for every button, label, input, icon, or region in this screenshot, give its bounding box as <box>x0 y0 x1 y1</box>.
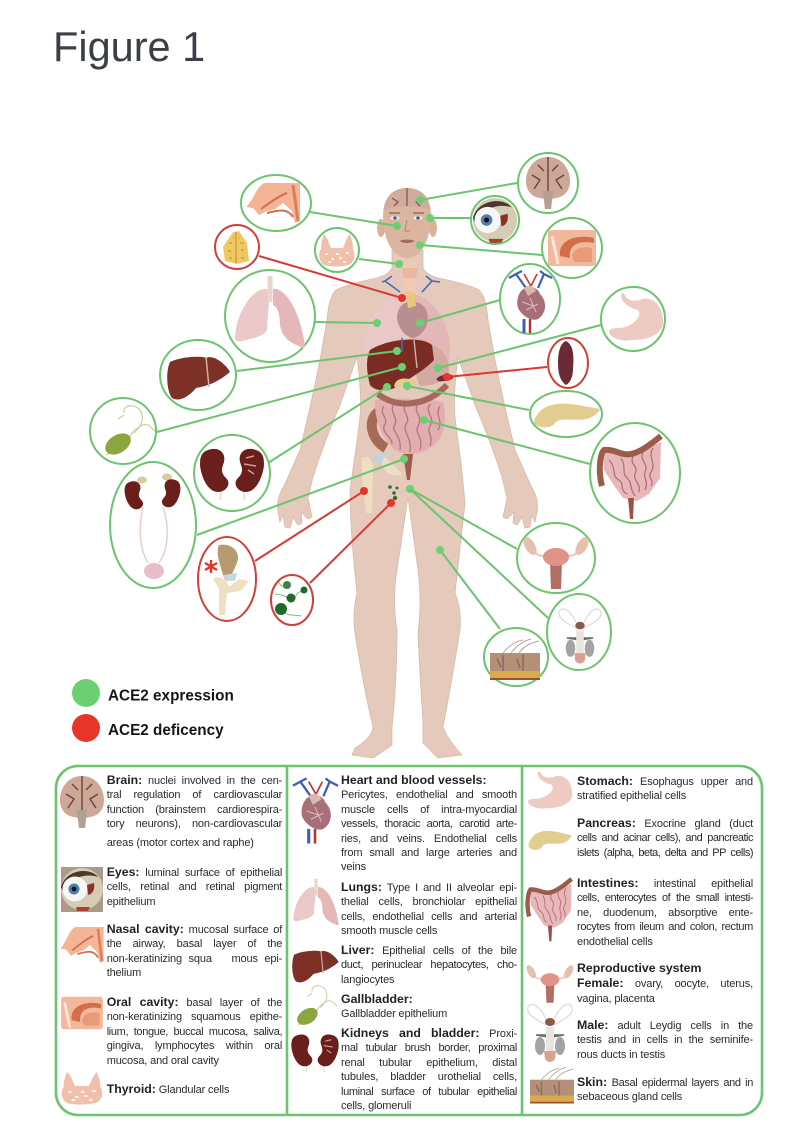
entry: kidneys and bladder: tubules, bladder urothelial cells, <box>341 1071 517 1083</box>
entry: oral cavity: mucosa, and oral cavity <box>107 1055 219 1067</box>
entry: kidneys and bladder: mal tubular brush border, proximal <box>341 1042 517 1054</box>
callout: liver <box>160 340 401 410</box>
entry: heart and blood vessels: muscle cells of intra-myocardial <box>341 804 517 816</box>
entry: intestines <box>525 876 754 948</box>
entry: nasal cavity: the airway, basal layer of the <box>107 938 282 950</box>
entry: heart and blood vessels: from small and large arteries and <box>341 847 517 859</box>
entry: brain: function (brainstem cardiorespira- <box>107 804 282 816</box>
blood vessels in body <box>382 276 440 352</box>
callout: gallbladder <box>90 363 406 464</box>
callout: male reproductive <box>410 489 611 670</box>
entry: reproductive system male: testis and in cells in the seminife- <box>577 1034 753 1046</box>
callout: lungs <box>225 270 381 362</box>
callout: hip bone deficiency <box>198 487 368 621</box>
entry: intestines: Intestines: intestinal epithelial <box>577 876 753 890</box>
callout: kidneys and bladder <box>110 455 408 588</box>
entry: heart and blood vessels: Pericytes, endothelial and smooth <box>341 789 517 801</box>
entry: reproductive system female: Female: ovary, oocyte, uterus, <box>577 976 753 990</box>
panel: organ descriptions <box>54 764 764 1116</box>
microbiota in body <box>388 485 398 500</box>
entry: kidneys and bladder <box>291 1026 517 1112</box>
entry: skin: sebaceous gland cells <box>577 1091 682 1103</box>
entry: eyes: cells, retinal and retinal pigment <box>107 881 282 893</box>
callout: pancreas <box>403 382 602 437</box>
entry: heart and blood vessels: vessels, thoracic aorta, carotid arte- <box>341 818 517 830</box>
entry: heart and blood vessels <box>292 773 517 873</box>
entry: nasal cavity <box>60 922 282 979</box>
entry: eyes: Eyes: luminal surface of epithelial <box>107 865 282 879</box>
callout: eye <box>426 196 519 244</box>
entry: gallbladder <box>297 985 447 1026</box>
entry: oral cavity <box>61 995 282 1067</box>
entry: lungs: Lungs: Type I and II alveolar epi- <box>341 880 517 894</box>
entry: stomach: stratified epithelial cells <box>577 790 686 802</box>
entry: heart and blood vessels: veins <box>341 861 366 873</box>
entry: brain: Brain: nuclei involved in the cen- <box>107 773 282 787</box>
entry: nasal cavity: non-keratinizing squa mous epi- <box>107 953 282 965</box>
entry: kidneys and bladder: luminal surface of tubular epithelial <box>341 1086 517 1098</box>
legend: deficiency <box>72 714 224 742</box>
entry: pancreas: Pancreas: Exocrine gland (duct <box>577 816 753 830</box>
entry: liver: Liver: Epithelial cells of the bile <box>341 943 517 957</box>
entry: oral cavity: Oral cavity: basal layer of the <box>107 995 282 1009</box>
callout: heart <box>416 264 560 334</box>
entry: kidneys and bladder: Kidneys and bladder: Proxi- <box>341 1026 517 1040</box>
callout: kidneys <box>194 383 391 511</box>
entry: thyroid <box>62 1072 230 1104</box>
intestines in body <box>372 385 447 480</box>
title: Figure 1 <box>53 23 205 70</box>
entry: liver: duct, perinuclear hepatocytes, cho- <box>341 959 517 971</box>
head <box>377 188 437 258</box>
callout: intestines <box>420 416 680 523</box>
human body figure <box>278 188 537 758</box>
entry: reproductive system male <box>527 1004 753 1062</box>
legend <box>72 679 234 742</box>
entry: brain <box>60 773 282 849</box>
entry: brain: tral regulation of cardiovascular <box>107 789 282 801</box>
entry: reproductive system female <box>526 961 753 1005</box>
entry: brain: areas (motor cortex and raphe) <box>107 837 254 849</box>
entry: liver: langiocytes <box>341 974 394 986</box>
entry: pancreas <box>528 816 754 859</box>
entry: kidneys and bladder: renal tubular epithelium, distal <box>341 1057 517 1069</box>
entry: skin: Skin: Basal epidermal layers and in <box>577 1075 753 1089</box>
entry: intestines: cells, enterocytes of the small intesti- <box>577 892 753 904</box>
entry: liver <box>292 943 517 986</box>
entry: nasal cavity: Nasal cavity: mucosal surface of <box>107 922 282 936</box>
entry: reproductive system male: rous ducts in testis <box>577 1049 665 1061</box>
entry: skin <box>530 1067 753 1104</box>
liver in body <box>367 340 434 390</box>
callout: adrenal deficiency <box>215 225 406 302</box>
callout: nasal cavity <box>241 175 401 231</box>
entry: heart and blood vessels: ries, and veins. Endothelial cells <box>341 833 517 845</box>
entry: reproductive system female: Reproductive system <box>577 961 701 975</box>
callout: oral cavity <box>416 218 602 278</box>
femur in body <box>362 453 402 513</box>
lungs in body <box>363 293 450 372</box>
entry: oral cavity: lium, tongue, buccal mucosa, saliva, <box>107 1026 282 1038</box>
entry: intestines: rocytes from ileum and colon, rectum <box>577 921 753 933</box>
legend: expression <box>72 679 234 707</box>
entry: lungs <box>293 878 517 937</box>
callout: uterus <box>406 485 595 593</box>
entry: heart and blood vessels: Heart and blood vessels: <box>341 773 487 787</box>
entry: stomach <box>528 772 753 809</box>
entry: lungs: thelial cells, bronchiolar epithelial <box>341 896 517 908</box>
entry: thyroid: Thyroid: Glandular cells <box>107 1082 229 1096</box>
entry: eyes <box>61 865 282 912</box>
callout: spleen deficiency <box>443 338 588 388</box>
heart in body <box>397 301 428 338</box>
adrenal and parathyroid in body <box>406 292 416 308</box>
legend: expression: ACE2 expression <box>108 688 234 704</box>
entry: oral cavity: gingiva, lymphocytes within oral <box>107 1040 282 1052</box>
entry: reproductive system male: Male: adult Leydig cells in the <box>577 1018 753 1032</box>
entry: oral cavity: non-keratinizing squamous epithe- <box>107 1011 282 1023</box>
entry: pancreas: islets (alpha, beta, delta and PP cells) <box>577 847 753 859</box>
entry: kidneys and bladder: cells, glomeruli <box>341 1100 411 1112</box>
entry: brain: tory neurons), non-cardiovascular <box>107 818 282 830</box>
entry: intestines: endothelial cells <box>577 936 653 948</box>
callout: skin <box>436 546 548 686</box>
entry: reproductive system female: vagina, placenta <box>577 993 655 1005</box>
stomach in body <box>416 344 449 386</box>
entry: gallbladder: Gallbladder: <box>341 992 413 1006</box>
entry: intestines: ne, duodenum, absorptive ente- <box>577 907 753 919</box>
spleen in body <box>436 373 454 382</box>
callout: brain <box>416 153 578 213</box>
callout: thyroid <box>315 228 403 272</box>
callout: gut microbiota deficiency <box>271 499 395 625</box>
pancreas in body <box>394 378 418 388</box>
thyroid and trachea <box>402 262 418 296</box>
entry: lungs: smooth muscle cells <box>341 925 437 937</box>
entry: gallbladder: Gallbladder epithelium <box>341 1008 447 1020</box>
legend: deficiency: ACE2 deficency <box>108 722 224 739</box>
callout: stomach <box>434 287 665 372</box>
entry: pancreas: cells and acinar cells), and pancreatic <box>577 832 753 844</box>
entry: eyes: epithelium <box>107 896 155 908</box>
entry: nasal cavity: thelium <box>107 967 141 979</box>
entry: lungs: cells, endothelial cells and arterial <box>341 911 517 923</box>
entry: stomach: Stomach: Esophagus upper and <box>577 774 753 788</box>
